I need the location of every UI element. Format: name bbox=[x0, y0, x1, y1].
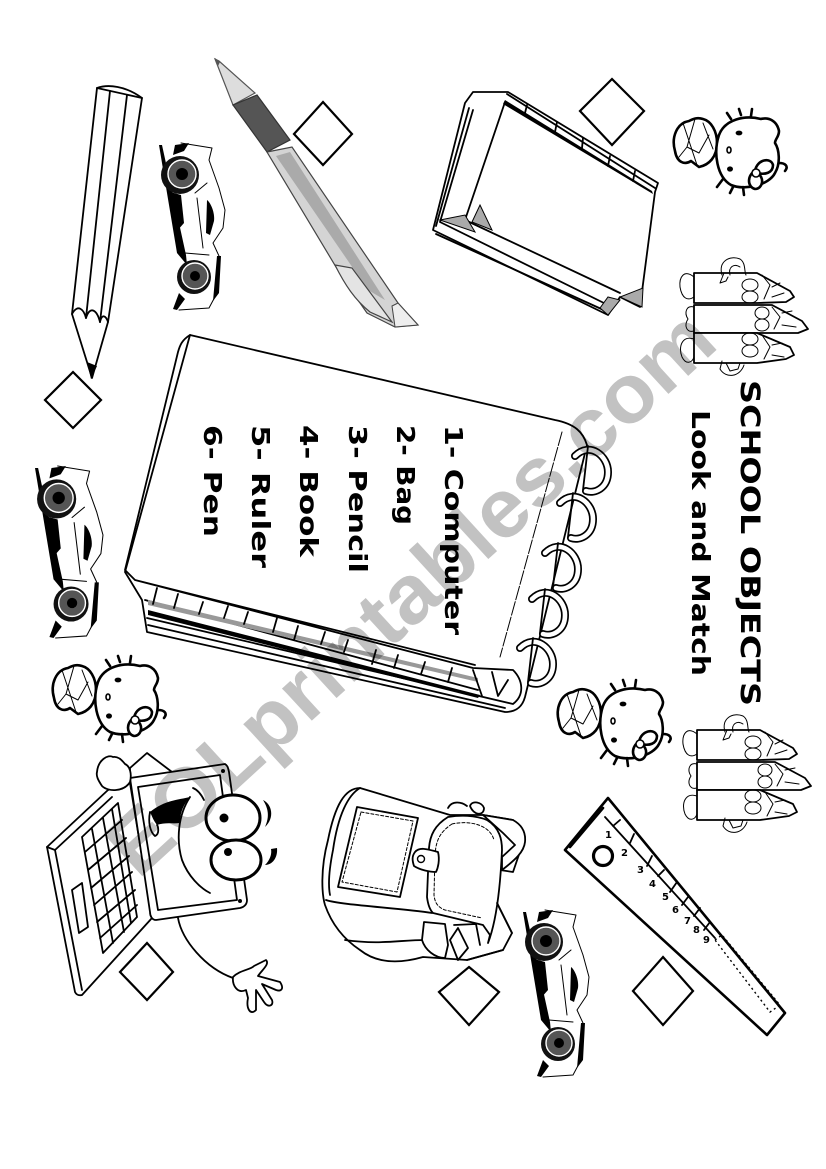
decoration: pencil characters bbox=[680, 258, 811, 832]
title bbox=[686, 380, 765, 706]
icon: large notebook bbox=[125, 335, 608, 712]
icon: ruler: 5 bbox=[662, 892, 669, 903]
word list: 2- Bag bbox=[391, 425, 420, 525]
icon: ruler: 9 bbox=[703, 935, 710, 946]
title: SCHOOL OBJECTS bbox=[734, 380, 765, 706]
watermark: EOLprintables.com bbox=[87, 291, 733, 893]
icon: book (top right) bbox=[433, 92, 658, 315]
title: Look and Match bbox=[686, 410, 715, 676]
decoration: kittens bbox=[53, 109, 787, 766]
word list: 3- Pencil bbox=[343, 425, 372, 573]
decoration: cars bbox=[35, 143, 589, 1077]
word list: 5- Ruler bbox=[246, 425, 275, 569]
word list: 4- Book bbox=[294, 425, 323, 559]
icon: ruler: 3 bbox=[637, 865, 644, 876]
icon: pencil bbox=[72, 86, 142, 379]
icon: ruler bbox=[565, 798, 785, 1035]
answer diamonds bbox=[45, 79, 693, 1025]
icon: laptop character bbox=[47, 753, 282, 1012]
icon: ruler: 8 bbox=[693, 925, 700, 936]
icon: school bag bbox=[322, 788, 525, 961]
icon: pen bbox=[215, 58, 418, 327]
word list: 1- Computer bbox=[439, 425, 468, 636]
notebook rings bbox=[520, 446, 608, 684]
icon: ruler: 1 bbox=[605, 830, 612, 841]
icon: ruler: 6 bbox=[672, 905, 679, 916]
word list: 6- Pen bbox=[198, 425, 227, 537]
icon: ruler: 2 bbox=[621, 848, 628, 859]
icon: ruler: 4 bbox=[649, 879, 656, 890]
word list bbox=[198, 425, 468, 636]
icon: ruler: 7 bbox=[684, 916, 691, 927]
